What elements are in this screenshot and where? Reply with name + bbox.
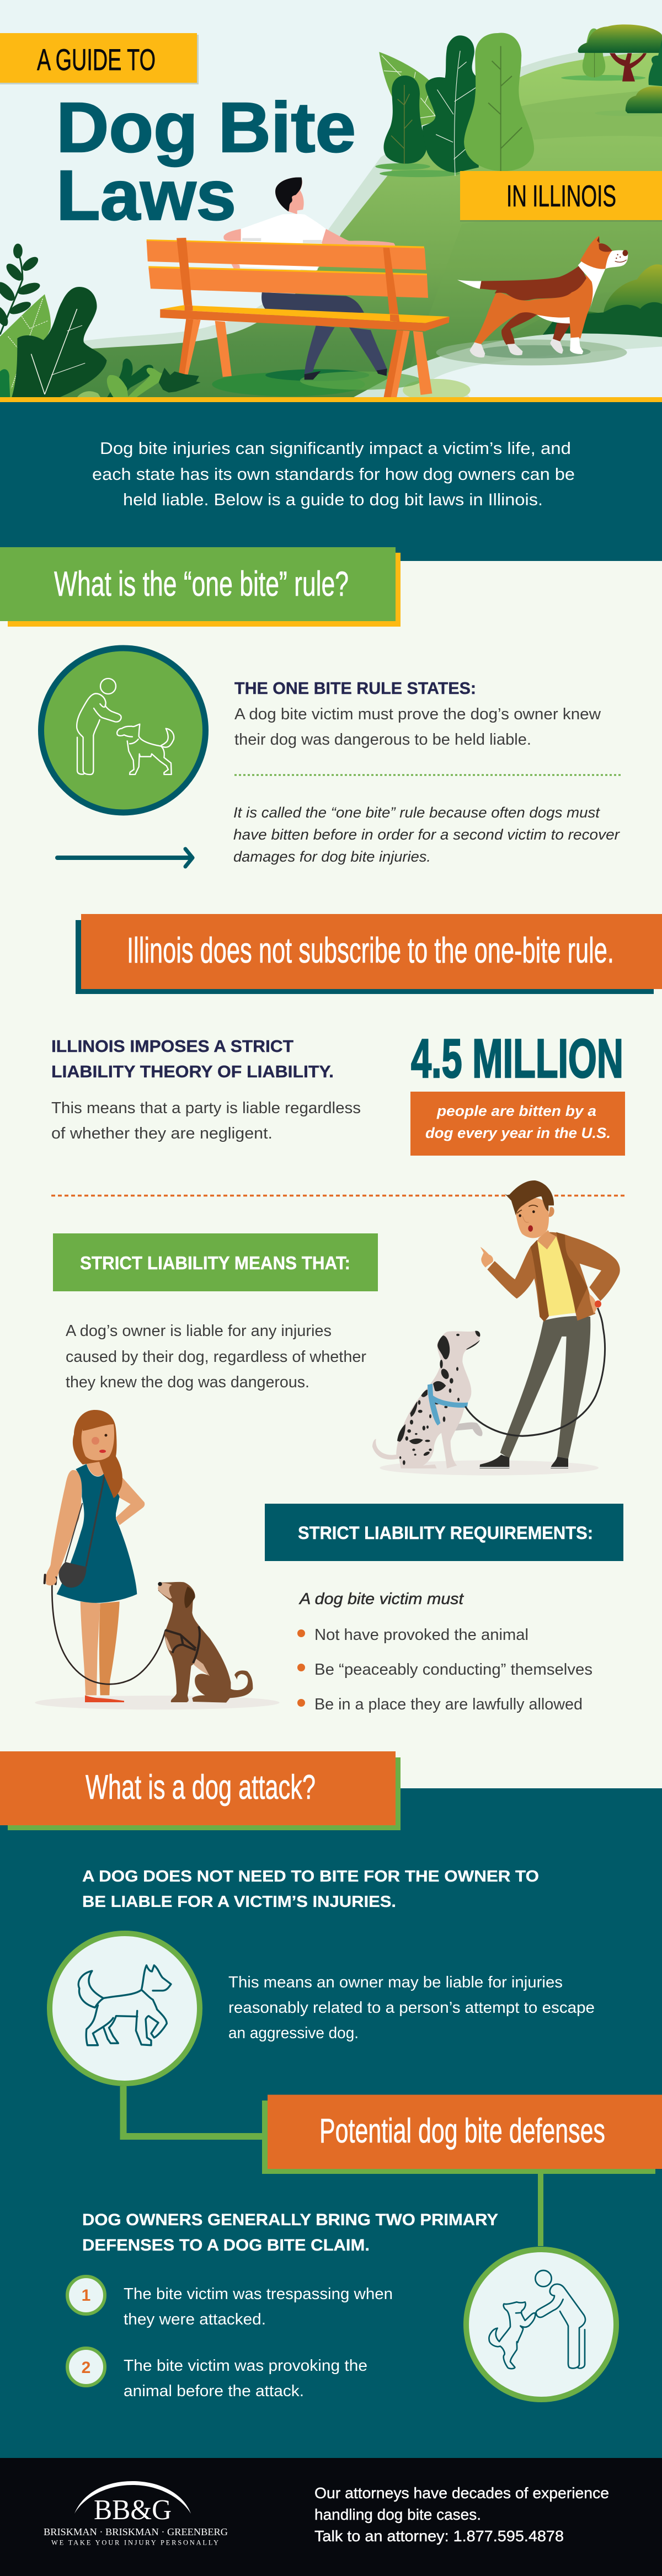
leash: [465, 1308, 605, 1436]
text block: one bite rule states: THE ONE BITE RULE STATES:: [234, 678, 476, 698]
text block: two primary defenses: DEFENSES TO A DOG BITE CLAIM.: [82, 2236, 370, 2254]
logo: BRISKMAN · BRISKMAN · GREENBERG: [44, 2526, 228, 2537]
far trees: [352, 24, 662, 402]
text block: strict liability theory: LIABILITY THEORY OF LIABILITY.: [51, 1062, 334, 1081]
list item 2: [67, 2348, 367, 2400]
text block: why it is called one bite: It is called the “one bite” rule because often dogs must: [233, 804, 601, 821]
text block: owner may be liable: This means an owner may be liable for injuries: [228, 1974, 563, 1991]
logo: WE TAKE YOUR INJURY PERSONALLY: [51, 2538, 218, 2546]
hill bands: [403, 88, 662, 387]
intro text: [92, 439, 575, 509]
banner: illinois does not subscribe: [76, 914, 662, 994]
text block: one bite rule states: A dog bite victim must prove the dog’s owner knew: [234, 706, 601, 723]
list item 1: [67, 2276, 393, 2328]
illustration: woman with brown dog: [35, 1410, 280, 1709]
light tree: [464, 33, 534, 171]
text block: dog need not bite: [82, 1868, 539, 1911]
text block: dog need not bite: BE LIABLE FOR A VICTIM’S INJURIES.: [82, 1893, 396, 1911]
footer text: [314, 2484, 609, 2545]
list: requirements: A dog bite victim must: [298, 1590, 464, 1608]
icon: walking dog: [50, 1933, 200, 2083]
small dark tree: [383, 76, 427, 164]
logo: BB&G: [94, 2494, 172, 2526]
text block: owner liable: they knew the dog was dangerous.: [66, 1373, 309, 1391]
text block: strict liability theory: [51, 1036, 361, 1142]
text block: one bite rule states: their dog was dangerous to be held liable.: [234, 731, 531, 749]
connector: circle to defenses: [124, 2086, 268, 2136]
panel: dog attack background: [0, 1788, 662, 2458]
dog in park: [457, 236, 628, 357]
bench and man: [147, 177, 450, 397]
text block: two primary defenses: DOG OWNERS GENERALLY BRING TWO PRIMARY: [82, 2211, 498, 2229]
title: Laws: [56, 156, 236, 235]
hill halo: [0, 44, 662, 398]
middle dark tree: [423, 35, 479, 173]
list item 1: 1: [82, 2286, 90, 2305]
text block: owner liable: [66, 1322, 367, 1391]
list: requirements: Not have provoked the animal: [314, 1626, 528, 1644]
heading: what is a dog attack: [0, 1751, 401, 1830]
text block: two primary defenses: [82, 2211, 498, 2254]
list: requirements: [297, 1590, 592, 1713]
banner: a guide to: [0, 33, 199, 84]
heading: strict liability requirements: [265, 1504, 623, 1561]
text block: why it is called one bite: have bitten before in order for a second victim to recover: [233, 826, 620, 843]
heading: potential dog bite defenses: [262, 2095, 662, 2174]
walking path: [352, 334, 662, 398]
heading: strict liability means: [53, 1233, 378, 1291]
text block: owner may be liable: reasonably related to a person’s attempt to escape: [228, 1999, 595, 2017]
woman head and hair: [73, 1410, 122, 1498]
text block: owner may be liable: [228, 1974, 595, 2042]
bench: [215, 321, 432, 395]
man upper body: [487, 1232, 620, 1322]
panel: footer: [0, 2458, 662, 2576]
list item 2: 2: [82, 2359, 90, 2377]
title: Dog Bite: [56, 88, 356, 167]
list item 1: they were attacked.: [124, 2311, 266, 2328]
footer text: handling dog bite cases.: [314, 2506, 481, 2523]
logo: [44, 2481, 228, 2546]
hero illustration: [0, 0, 662, 402]
panel: intro: [0, 402, 662, 561]
callout: people bitten: [410, 1092, 625, 1156]
heading: one bite rule: [0, 547, 401, 627]
list item 2: animal before the attack.: [124, 2382, 304, 2400]
text block: strict liability theory: This means that a party is liable regardless: [51, 1099, 361, 1117]
title: [56, 88, 356, 235]
heading: strict liability means: STRICT LIABILITY MEANS THAT:: [80, 1253, 350, 1273]
callout: people bitten: dog every year in the U.S.: [425, 1125, 611, 1141]
text block: owner liable: caused by their dog, regardless of whether: [66, 1348, 367, 1366]
large pale leaf: [379, 52, 436, 126]
list item 2: The bite victim was provoking the: [124, 2357, 367, 2375]
text block: strict liability theory: of whether they are negligent.: [51, 1125, 273, 1142]
list: requirements: Be in a place they are lawfully allowed: [314, 1696, 583, 1713]
text block: one bite rule states: [234, 678, 601, 749]
text block: why it is called one bite: [233, 804, 620, 865]
man legs: [500, 1316, 590, 1458]
text block: dog need not bite: A DOG DOES NOT NEED TO BITE FOR THE OWNER TO: [82, 1868, 539, 1885]
hero accent stripe: [0, 397, 662, 402]
trees group: [375, 33, 534, 177]
man: [275, 177, 304, 214]
footer text: Our attorneys have decades of experience: [314, 2484, 609, 2502]
intro text: Dog bite injuries can significantly impact a victim’s life, and: [100, 439, 571, 458]
banner: a guide to: A GUIDE TO: [37, 42, 156, 77]
icon: person training dog: [41, 648, 205, 813]
intro text: held liable. Below is a guide to dog bit laws in Illinois.: [123, 490, 543, 509]
connector: defenses to circle: [538, 2174, 543, 2246]
text block: owner liable: A dog’s owner is liable for any injuries: [66, 1322, 332, 1340]
list: requirements: Be “peaceably conducting” themselves: [314, 1661, 592, 1679]
heading: what is a dog attack: What is a dog attack?: [86, 1768, 316, 1807]
text block: why it is called one bite: damages for dog bite injuries.: [233, 848, 431, 865]
illustration: man scolding dalmatian: [372, 1180, 620, 1476]
heading: strict liability requirements: STRICT LIABILITY REQUIREMENTS:: [298, 1523, 593, 1543]
banner: in illinois: [460, 171, 662, 222]
callout: people bitten: people are bitten by a: [436, 1103, 596, 1119]
heading: one bite rule: What is the “one bite” rule?: [54, 565, 349, 603]
foreground plants: [0, 244, 200, 398]
intro text: each state has its own standards for how dog owners can be: [92, 464, 575, 484]
list item 1: The bite victim was trespassing when: [124, 2285, 393, 2303]
arrow: [57, 849, 193, 867]
icon: person and jumping dog: [466, 2249, 616, 2399]
footer text: Talk to an attorney: 1.877.595.4878: [314, 2527, 564, 2545]
green hill: [0, 52, 662, 398]
text block: strict liability theory: ILLINOIS IMPOSES A STRICT: [51, 1036, 293, 1056]
text block: owner may be liable: an aggressive dog.: [228, 2024, 359, 2042]
